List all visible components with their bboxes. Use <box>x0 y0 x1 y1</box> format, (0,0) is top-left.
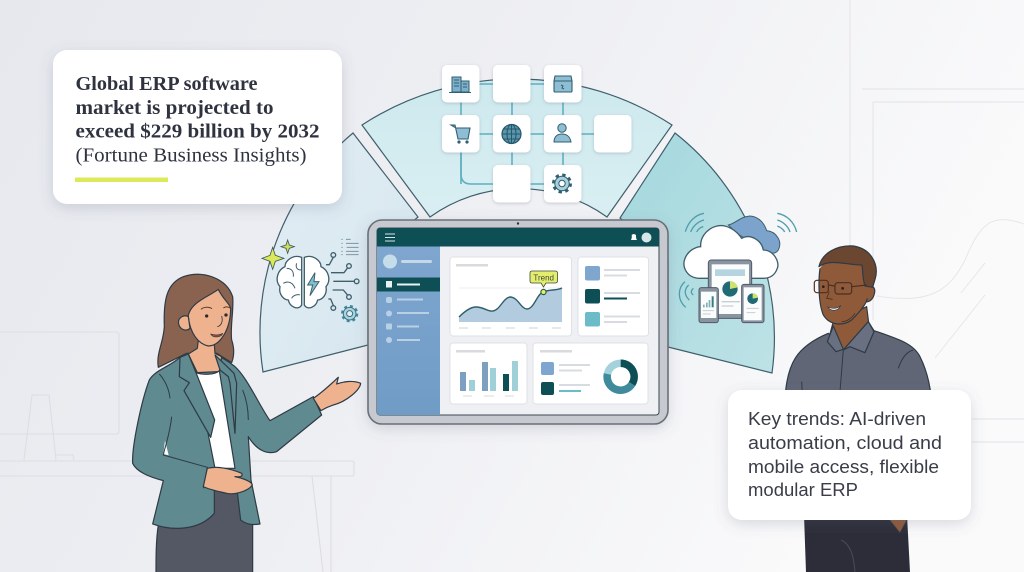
shirt <box>785 322 932 400</box>
tile: user icon <box>544 115 582 152</box>
tablet dashboard <box>368 220 668 424</box>
outstretched hand <box>313 377 361 411</box>
callout heading text: Global ERP software <box>76 73 258 95</box>
key trends text: automation, cloud and <box>748 433 942 453</box>
ear <box>178 316 190 330</box>
connector lines <box>461 84 613 184</box>
tile: building icon <box>442 65 480 102</box>
module network <box>442 65 632 202</box>
callout heading text: exceed $229 billion by 2032 <box>76 120 320 142</box>
fan segment: modular ERP (top) <box>362 79 672 217</box>
skirt <box>156 483 253 572</box>
face <box>188 289 231 346</box>
card: list summary <box>578 257 648 336</box>
hair <box>819 246 876 287</box>
collar <box>827 322 874 353</box>
tablet device <box>708 260 752 318</box>
tile: globe icon <box>493 115 530 152</box>
left phone <box>699 288 718 323</box>
tile: blank <box>493 165 530 202</box>
callout heading text: (Fortune Business Insights) <box>76 144 306 166</box>
lapel right <box>215 355 237 433</box>
card: trend line chart <box>450 257 572 336</box>
tablet frame <box>368 220 668 424</box>
stars <box>262 247 284 269</box>
gear <box>342 306 357 321</box>
icon: AI brain with circuits <box>262 239 359 321</box>
ear <box>865 286 875 302</box>
jacket creases <box>159 374 248 488</box>
key trends text <box>748 409 942 500</box>
mini list <box>341 239 359 255</box>
brain <box>277 256 302 308</box>
header bar <box>377 228 659 246</box>
white shirt <box>196 371 235 468</box>
card: bar chart <box>450 343 527 404</box>
head <box>819 255 872 324</box>
tile: gear icon <box>544 165 582 202</box>
woman presenter <box>133 274 361 572</box>
man presenter <box>785 246 932 400</box>
icon: cloud with devices <box>679 213 797 323</box>
hair back <box>158 274 234 367</box>
wifi arcs <box>679 213 797 307</box>
head outline <box>819 268 867 324</box>
background office line art: right wall panels <box>850 0 1024 442</box>
screen <box>377 228 659 415</box>
fan segment: AI (left) <box>260 133 418 372</box>
tile: blank <box>493 65 530 102</box>
tile: shopping cart icon <box>442 115 480 152</box>
callout: key trends <box>728 390 971 520</box>
tile: blank <box>594 115 632 152</box>
circuits <box>326 253 359 310</box>
shirt details <box>802 350 913 400</box>
background office line art: left desk and monitor <box>0 332 354 572</box>
accent underline <box>75 178 168 182</box>
waist hand <box>203 467 252 494</box>
right phone <box>742 284 764 323</box>
trend tag: Trend <box>533 273 554 282</box>
blue cloud <box>728 216 780 253</box>
callout: market projection <box>53 50 342 204</box>
card: donut chart <box>533 343 648 404</box>
fan segment: cloud (right) <box>620 133 774 373</box>
callout heading text <box>76 73 320 166</box>
sidebar <box>377 246 440 415</box>
key trends text: modular ERP <box>748 480 858 500</box>
key trends text: Key trends: AI-driven <box>748 409 926 429</box>
tile: box icon <box>544 65 582 102</box>
neck <box>188 340 222 373</box>
white cloud <box>684 226 778 278</box>
callout heading text: market is projected to <box>76 97 274 119</box>
jacket <box>133 355 322 528</box>
key trends text: mobile access, flexible <box>748 457 939 477</box>
face details <box>814 280 867 322</box>
man trousers <box>804 515 910 572</box>
shirt sliver <box>163 441 169 455</box>
lapel left <box>179 354 215 437</box>
neck <box>828 307 870 352</box>
face details <box>201 307 230 337</box>
